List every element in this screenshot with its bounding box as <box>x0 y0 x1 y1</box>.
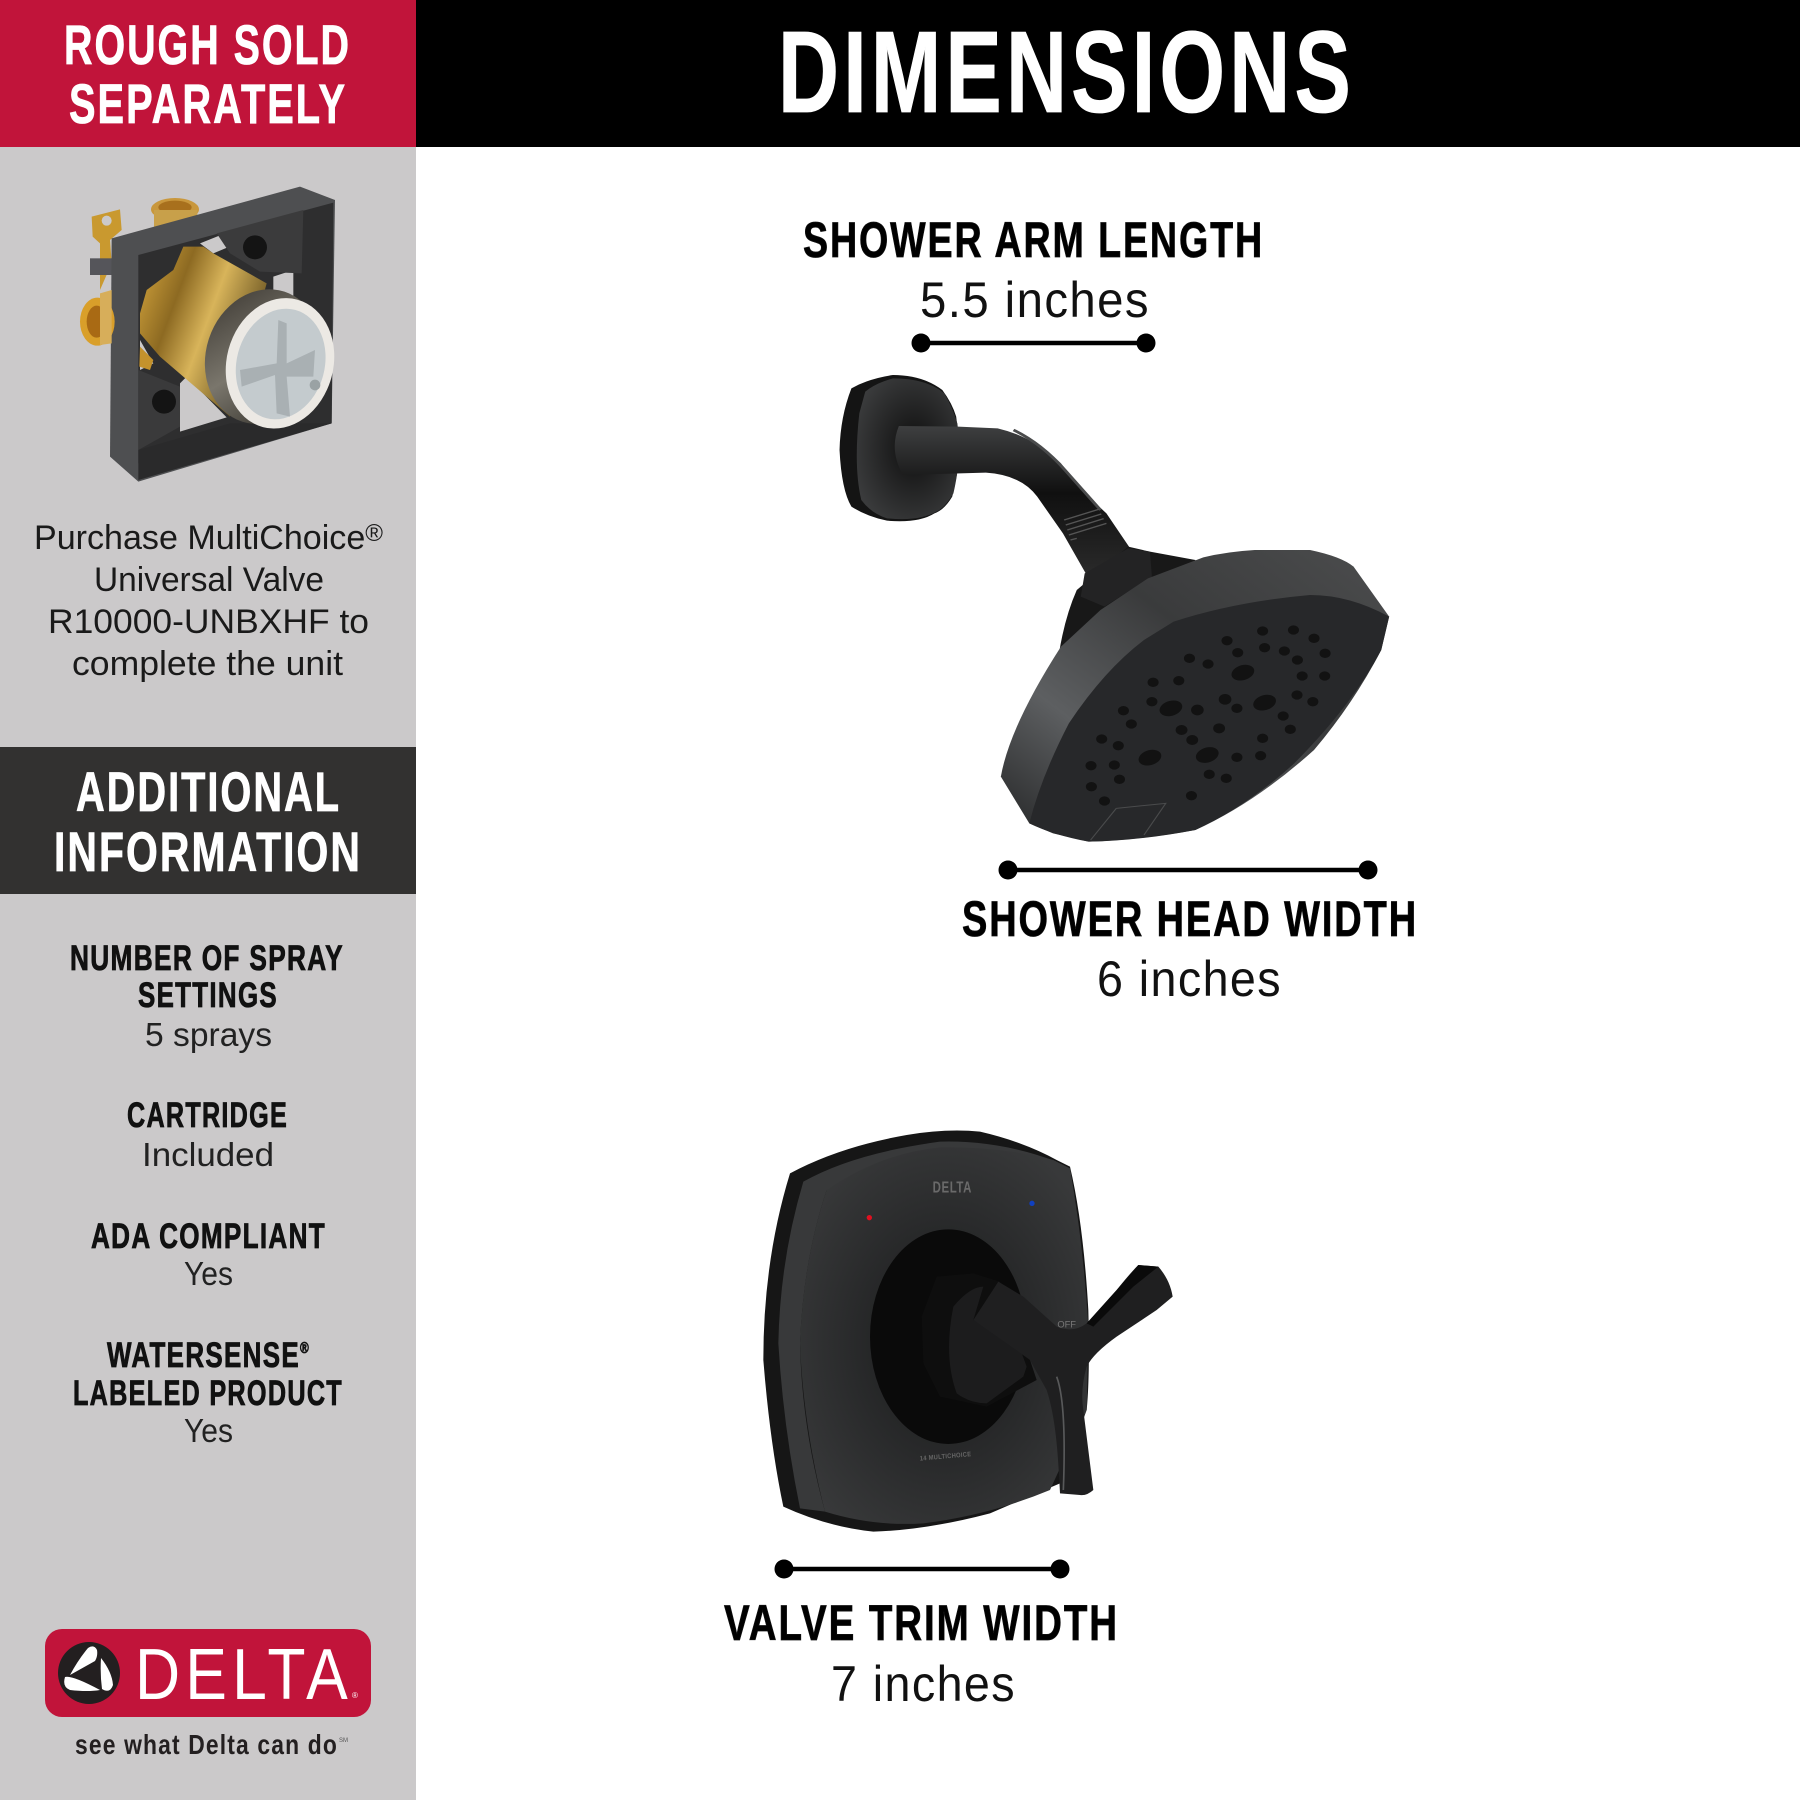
info: watersense labeled product: WATERSENSE <box>107 1336 367 1375</box>
title: dimensions <box>416 0 1800 147</box>
head back <box>1059 547 1195 667</box>
text block: purchase note: Purchase MultiChoice <box>34 519 365 557</box>
panel: left sidebar background <box>0 147 416 1800</box>
label: shower head width: SHOWER HEAD WIDTH <box>962 891 1418 947</box>
info: ada compliant: ADA COMPLIANT <box>91 1217 326 1256</box>
escutcheon <box>840 375 960 521</box>
label: valve trim width: VALVE TRIM WIDTH <box>724 1595 1119 1651</box>
heading: additional information: ADDITIONAL <box>76 760 341 823</box>
info: watersense labeled product: ® <box>300 1340 310 1357</box>
icon: shower head and arm <box>840 375 1389 842</box>
text block: purchase note: ® <box>365 520 383 547</box>
frame back wall <box>110 187 335 482</box>
face <box>1029 595 1389 842</box>
logo: delta: see what Delta can do <box>75 1729 338 1760</box>
info: number of spray settings: SETTINGS <box>138 976 278 1015</box>
text block: purchase note: complete the unit <box>72 645 344 683</box>
heading: additional information: INFORMATION <box>54 820 362 883</box>
icon: valve trim and handle <box>763 1131 1173 1532</box>
icon: valve trim and handle: OFF <box>1057 1319 1076 1329</box>
info: number of spray settings: 5 sprays <box>145 1016 272 1053</box>
logo: delta: ® <box>352 1691 358 1700</box>
info: watersense labeled product <box>73 1336 343 1449</box>
header: rough sold separately <box>0 0 416 147</box>
icon: valve trim and handle: 14 MULTICHOICE <box>920 1451 972 1463</box>
label: valve trim width: 7 inches <box>831 1656 1016 1712</box>
icon: valve trim and handle: DELTA <box>933 1179 972 1196</box>
logo: delta: DELTA <box>135 1635 353 1715</box>
heading: additional information <box>0 747 416 894</box>
info: watersense labeled product: Yes <box>184 1412 233 1449</box>
info: ada compliant <box>91 1217 326 1292</box>
arrow: valve trim dimension line <box>774 1560 1070 1578</box>
label: shower arm length <box>803 212 1264 328</box>
label: shower arm length: 5.5 inches <box>920 272 1150 328</box>
hub <box>922 1273 1037 1407</box>
indicator dots <box>867 1215 872 1220</box>
info: number of spray settings: NUMBER OF SPRAY <box>70 939 344 978</box>
info: cartridge <box>127 1096 288 1173</box>
info: cartridge: CARTRIDGE <box>127 1096 288 1135</box>
label: valve trim width <box>724 1595 1119 1712</box>
info: cartridge: Included <box>142 1136 274 1173</box>
info: ada compliant: Yes <box>184 1255 233 1292</box>
text block: purchase note: Universal Valve <box>94 561 324 599</box>
info: watersense labeled product: LABELED PRODUCT <box>73 1374 343 1413</box>
title: dimensions: DIMENSIONS <box>778 7 1355 137</box>
rim <box>1001 550 1389 842</box>
logo: delta: SM <box>339 1738 348 1744</box>
arrow: shower head dimension line <box>998 860 1378 880</box>
arm <box>895 426 1130 575</box>
label: shower arm length: SHOWER ARM LENGTH <box>803 212 1264 268</box>
dial <box>870 1229 1027 1444</box>
info: number of spray settings <box>70 939 344 1053</box>
text block: purchase note <box>34 519 383 683</box>
lever <box>973 1265 1173 1495</box>
header: rough sold separately: SEPARATELY <box>69 72 347 135</box>
text block: purchase note: R10000-UNBXHF to <box>48 603 369 641</box>
header: rough sold separately: ROUGH SOLD <box>64 13 351 76</box>
label: shower head width <box>962 891 1418 1007</box>
icon: rough-in valve product photo <box>80 187 349 482</box>
brass <box>80 298 115 346</box>
logo: delta <box>45 1629 371 1760</box>
label: shower head width: 6 inches <box>1097 951 1282 1007</box>
plate <box>763 1131 1089 1532</box>
arrow: shower arm dimension line <box>912 334 1156 352</box>
collar and cover <box>188 274 339 439</box>
